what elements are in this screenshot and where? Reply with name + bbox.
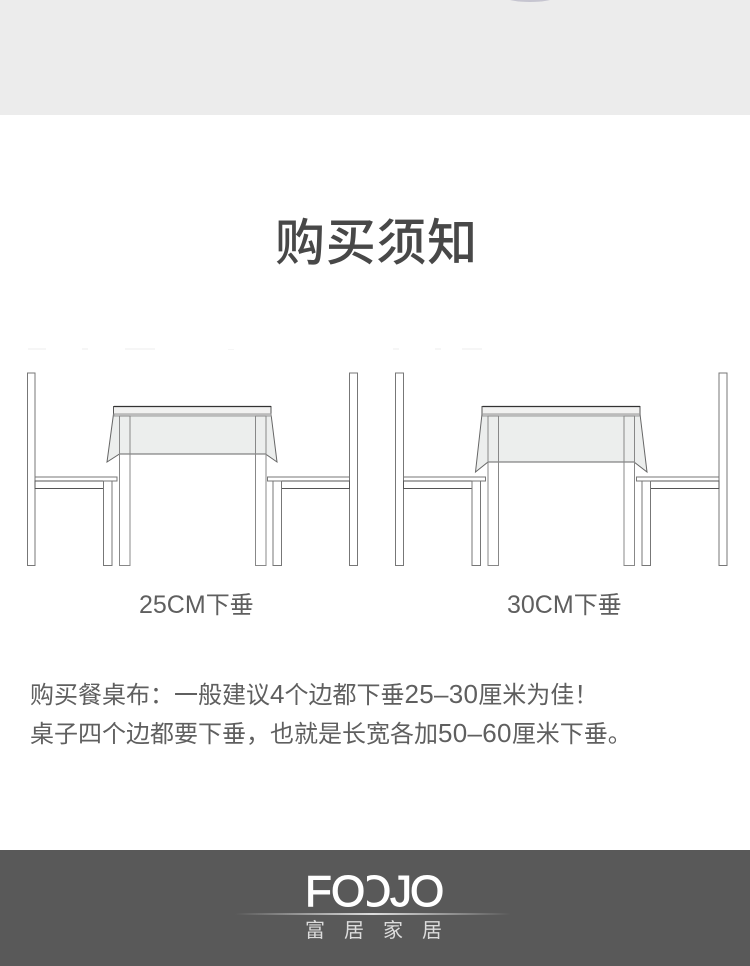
right chair 30cm <box>636 373 727 566</box>
diagram: 30cm drop <box>396 373 727 566</box>
footer band <box>0 850 750 966</box>
brand logo <box>244 867 502 916</box>
logo wordmark: O <box>357 867 391 916</box>
table top 30cm <box>482 406 640 416</box>
tablecloth 25cm <box>107 414 277 462</box>
caption: 25CM: 25CM下垂 <box>139 591 254 619</box>
logo wordmark <box>308 875 443 907</box>
brand name: 富居家居 <box>305 920 461 942</box>
tablecloth 30cm <box>476 414 647 472</box>
note line 1: 购买餐桌布：一般建议4个边都下垂25–30厘米为佳！ <box>30 679 598 709</box>
diagram: 25cm drop <box>28 373 358 566</box>
table top 25cm <box>114 406 271 416</box>
left chair 30cm <box>396 373 486 566</box>
logo wordmark: F <box>305 867 332 916</box>
top grey band <box>0 0 750 115</box>
diagrams <box>27 348 728 566</box>
caption: 30CM: 30CM下垂 <box>507 591 622 619</box>
logo wordmark: O <box>331 867 365 916</box>
logo wordmark: J <box>390 867 412 916</box>
right chair 25cm <box>268 373 358 566</box>
logo divider <box>235 913 511 915</box>
left chair 25cm <box>28 373 117 566</box>
note line 2: 桌子四个边都要下垂，也就是长宽各加50–60厘米下垂。 <box>30 718 632 748</box>
logo wordmark: O <box>410 867 444 916</box>
table legs 25cm <box>120 416 266 566</box>
partial plate edge <box>510 0 550 2</box>
table legs 30cm <box>488 416 634 566</box>
title: 购买须知 <box>275 203 478 275</box>
